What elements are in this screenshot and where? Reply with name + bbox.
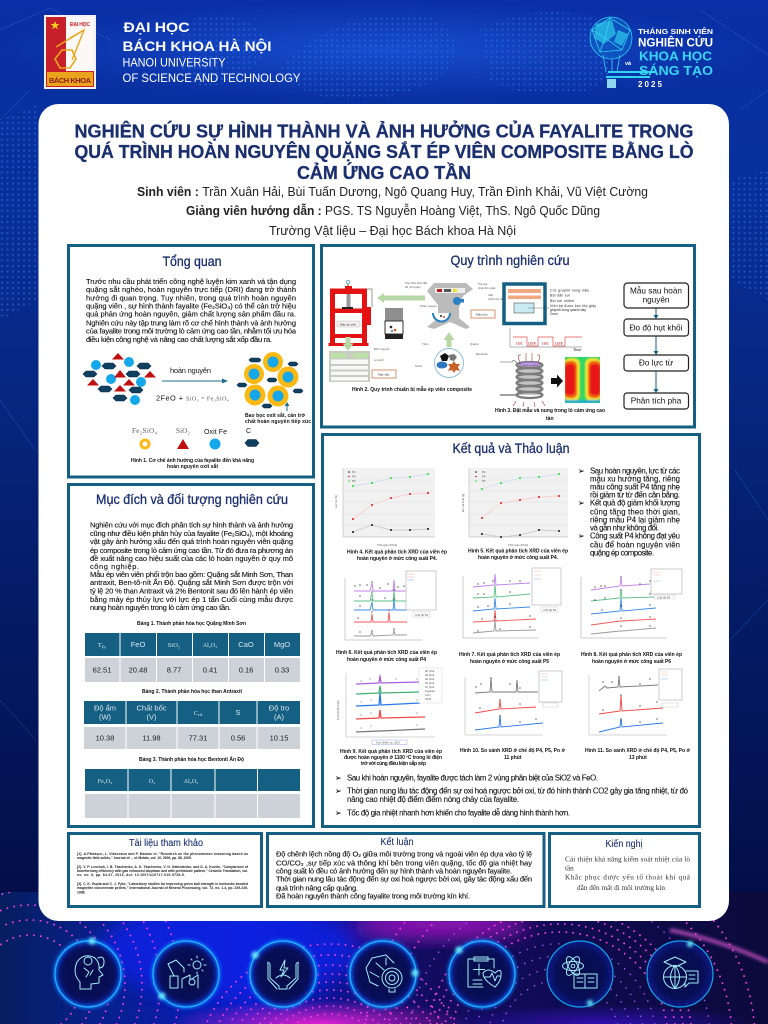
- chart: figure 10 XRD: [465, 671, 562, 735]
- furnace section: Bột dẫn sơi: [550, 292, 570, 298]
- chart: figure 9 XRD: 40 phút: [425, 677, 435, 681]
- hydraulic press: Máy ép viên: [340, 322, 357, 326]
- caption: figure 11: Hình 11. So sánh XRD ở chế độ P4, P5, Po ở: [585, 747, 690, 754]
- heating timing chart: OFF: [555, 341, 564, 346]
- objectives text: cũng như điều kiện phân hủy của fayalite (Fe₂SiO₄), một khoáng: [90, 529, 293, 538]
- chart: figure 5: Độ hụt khối (g): [461, 494, 465, 512]
- reference list: bioreforming efficiency with gas enhanced biophase and with prehistoric pattern," Ceramic Translation, vol.: [77, 869, 248, 873]
- table 2: Chất bốc: [136, 704, 167, 712]
- conclusion text: Thời gian nung lâu tác động đến sự oxi hoá ngược bởi oxi, gây tác động xấu đến: [276, 874, 532, 884]
- chart: figure 5: P4: [482, 470, 486, 474]
- caption: figure 5: hoàn nguyên ở mức công suất P4.: [478, 554, 559, 561]
- title: NGHIÊN CỨU SỰ HÌNH THÀNH VÀ ẢNH HƯỞNG CỦA FAYALITE TRONG: [74, 120, 694, 142]
- heating timing chart: ON: [542, 341, 549, 346]
- table 2: S: [235, 708, 241, 717]
- reference list: [1]. A.Pătrașcu, L. Vlăsceanu and P. Manoiu et. "Research on the phenomenon reasoning based on: [77, 852, 248, 856]
- temperature field: [564, 357, 601, 403]
- chart: figure 7 XRD: [463, 568, 561, 638]
- table 1: T: [98, 642, 102, 649]
- table 3: [85, 756, 300, 818]
- heading: objectives: Mục đích và đối tượng nghiên cứu: [96, 491, 288, 507]
- university name: OF SCIENCE AND TECHNOLOGY: [122, 73, 301, 85]
- heating timing chart: ON: [516, 341, 523, 346]
- conclusion text: quá trình nâng cấp quặng.: [276, 884, 358, 892]
- chart: figure 9 XRD: Fayalite: [425, 689, 435, 693]
- heading: process: Quy trình nghiên cứu: [450, 252, 570, 268]
- title: QUÁ TRÌNH HOÀN NGUYÊN QUẶNG SẮT ÉP VIÊN COMPOSITE BẰNG LÒ: [74, 141, 694, 162]
- panel: research process: [322, 246, 694, 427]
- heading: conclusion: Kết luận: [380, 836, 414, 848]
- conclusion text: công suất lò đều có ảnh hưởng đến sự hình thành và hoàn nguyên fayalite.: [276, 866, 512, 876]
- table 1: 20.48: [129, 666, 147, 674]
- objectives text: Mẫu ép viên viên phối trộn bao gồm: Quặng sắt Minh Sơn, Than: [90, 570, 293, 579]
- panel: objectives: [68, 484, 314, 826]
- heating timing chart: Time: [573, 347, 582, 352]
- table 1: FeO: [131, 640, 145, 649]
- results bullets: magnetic force: mẫu xu hướng tăng, riêng: [590, 474, 680, 484]
- reference list: magnetic field solids," Journal of ... of Metals, vol. 10, 2009, pp. 86, 2009.: [77, 856, 192, 860]
- heating timing chart: OFF: [528, 341, 537, 346]
- reactant cluster: [83, 353, 156, 405]
- mixer: Trả vào: [478, 282, 488, 286]
- caption: figure 10: Hình 10. So sánh XRD ở chế độ P4, P5, Po ở: [460, 747, 565, 754]
- mixer: [405, 281, 504, 329]
- results bullets: magnetic force: quặng ép composite.: [590, 548, 654, 558]
- chart: figure 9 XRD: 60 phút: [425, 673, 435, 677]
- recommendations text: Khắc phục được yếu tố thoát khí quá: [565, 874, 691, 882]
- conclusion text: CO/CO₂ ,sự tiếp xúc và thông khí bên trong viên quặng, tốc độ gia nhiệt hay: [276, 858, 532, 868]
- caption: figure 3: tần: [546, 416, 554, 422]
- chart: figure 4: P5: [352, 474, 356, 478]
- results bullets: fayalite: Thời gian nung lâu tác động đến sự oxi hoá ngược bởi oxi, từ đó hình thành CO2 gây gia tăng nhiệt, từ đó: [347, 786, 689, 796]
- recommendations text: dẫn đến mất đi môi trường kín: [577, 883, 665, 892]
- legend: Fe₂SiO₄: [132, 427, 158, 435]
- reaction arrow: hoàn nguyên: [170, 366, 211, 375]
- overview text: hướng đi quan trọng. Tuy nhiên, trong quá trình hoàn nguyên: [86, 293, 296, 302]
- objectives text: nung hoàn nguyên trong lò cảm ứng cao tần.: [90, 603, 231, 612]
- mould: [385, 308, 403, 339]
- table 3: Bảng 3. Thành phần hóa học Bentonit Ấn Độ: [139, 756, 244, 763]
- reaction equation: 2FeO + SiO₂ = Fe₂SiO₄: [156, 394, 229, 402]
- ingredient circle: Quặng: [470, 342, 479, 346]
- authors: [137, 185, 648, 238]
- table 1: Fe: [102, 644, 106, 650]
- overview text: của fayalite trong môi trường lò cảm ứng cao tần, nhằm tối ưu hóa: [86, 326, 297, 335]
- conclusion text: [276, 850, 532, 900]
- table 2: 10.38: [96, 734, 114, 742]
- table 1: CaO: [238, 640, 254, 649]
- chart: figure 4: P6: [352, 479, 356, 483]
- results bullets: magnetic force: Sau hoàn nguyên, lực từ các: [590, 466, 680, 476]
- overview text: quặng sắt nghèo, hoàn nguyên trực tiếp (DRI) đang trở thành: [86, 285, 296, 294]
- objectives text: bằng máy ép thủy lực với lực ép 1 tấn Cuối cùng mẫu được: [90, 595, 293, 604]
- drying cabinet: Bình nguyên: [374, 347, 390, 351]
- chart: figure 4: P4: [352, 470, 356, 474]
- caption: figure 3: [495, 407, 605, 422]
- caption: figure 10: [460, 747, 565, 761]
- step 2: Đo độ hụt khối: [630, 324, 683, 332]
- table 3: O₂: [149, 779, 155, 785]
- product cluster: chất hoàn nguyên tiếp xúc: [245, 418, 311, 425]
- results bullets: magnetic force: ➢: [578, 466, 585, 476]
- chart: figure 4: Thời gian (Phút): [377, 543, 397, 547]
- heading: references: Tài liệu tham khảo: [129, 837, 203, 849]
- caption: figure 2: Hình 2. Quy trình chuẩn bị mẫu ép viên composite: [352, 386, 472, 393]
- conclusion text: Độ chênh lệch nồng độ O₂ giữa môi trường trong và ngoài viên ép dựa vào tỷ lệ: [276, 850, 532, 858]
- caption: figure 3: Hình 3. Đặt mẫu và nung trong lò cảm ứng cao: [495, 407, 605, 414]
- results bullets: fayalite: Sau khi hoàn nguyên, fayalite được tách làm 2 vùng phân biệt của SiO2 và FeO.: [347, 774, 598, 782]
- furnace section: [504, 284, 596, 324]
- table 2: 0.56: [231, 734, 245, 742]
- step 1: [624, 283, 688, 308]
- process arrows: [342, 293, 454, 351]
- objectives text: vật gây ảnh hưởng xấu đến quá trình hoàn nguyên viên quặng: [90, 537, 293, 546]
- table 1: [85, 621, 300, 682]
- results bullets: fayalite: nâng cao nhiệt độ điểm điểm nóng chảy của fayalite.: [347, 795, 519, 804]
- caption: figure 9: được hoàn nguyên ở 1100 ºC trong lò điện: [344, 755, 442, 761]
- table 2: 77.31: [189, 734, 207, 742]
- captions: figures 6 to 8: Hình 8. Kết quả phân tích XRD của viên ép: [581, 651, 682, 658]
- furnace section: Cốc graphit nung mẫu: [550, 288, 589, 292]
- table 1: 0.16: [239, 666, 253, 674]
- chart: figure 9 XRD: [336, 668, 442, 745]
- chart: figure 8 XRD: Chế độ P6: [657, 596, 671, 600]
- caption: figure 4: Hình 4. Kết quả phân tích XRD của viên ép: [347, 548, 447, 556]
- panel: recommendations: [550, 834, 700, 906]
- table 2: C: [194, 711, 198, 717]
- icon: hands and lightning: [250, 941, 316, 1007]
- table 1: Bảng 1. Thành phần hóa học Quặng Minh Sơn: [137, 621, 246, 627]
- caption: figure 5: [468, 548, 568, 561]
- mixer: Máy trộn: [476, 312, 488, 316]
- table 1: 62.51: [93, 666, 111, 674]
- table 2: (A): [274, 712, 284, 722]
- caption: figure 11: [585, 747, 690, 761]
- heading: results: Kết quả và Thảo luận: [452, 440, 570, 456]
- logo: Bách Khoa shield: ĐẠI HỌC: [70, 22, 90, 28]
- ingredient circle: [415, 342, 488, 378]
- heating timing chart: [510, 328, 582, 352]
- main white card: [38, 104, 729, 921]
- table 1: 0.41: [203, 666, 217, 674]
- chart: figure 9 XRD: FeO: [425, 693, 431, 697]
- step 3: Đo lực từ: [639, 358, 674, 368]
- hydraulic press: [328, 280, 372, 346]
- legend: SiO₂: [176, 427, 191, 435]
- results bullets: magnetic force: Kết quả độ giảm khối lượng: [590, 498, 680, 508]
- objectives text: tỷ lệ 20 % than Antraxit và 2% Bentonit sau đó lên hành ép viên: [90, 586, 293, 596]
- captions: figures 6 to 8: Hình 7. Kết quả phân tích XRD của viên ép: [459, 651, 560, 658]
- caption: figure 1: Hình 1. Cơ chế ảnh hưởng của fayalite đến khả năng: [131, 457, 254, 464]
- objectives text: công nghiệp.: [90, 562, 139, 571]
- table 2: cd: [198, 712, 203, 717]
- step 1: nguyên: [643, 296, 670, 304]
- furnace section: Viên ép được bọc lớp giấy: [550, 304, 596, 308]
- captions: figures 6 to 8: hoàn nguyên ở mức công suất P4: [347, 656, 426, 663]
- table 2: Bảng 2. Thành phần hóa học than Antraxit: [142, 689, 242, 695]
- event logo: student research month 2025: KHOA HỌC: [639, 48, 713, 64]
- table 3: Fe₂O₃: [98, 779, 112, 785]
- university name: [122, 20, 301, 85]
- caption: figure 4: [347, 548, 447, 562]
- table 2: Độ ẩm: [94, 704, 116, 712]
- icon: AI head: [55, 938, 121, 1007]
- title: CẢM ỨNG CAO TẦN: [297, 162, 471, 183]
- figure 3: induction furnace: [495, 284, 605, 422]
- captions: figures 6 to 8: [336, 649, 682, 665]
- objectives text: đề xuất nâng cao hiệu suất của các lò hoàn nguyên ở quy mô: [90, 554, 293, 563]
- mixer: Cần: [488, 293, 494, 297]
- chart: figure 5: P5: [482, 474, 486, 478]
- event logo: student research month 2025: THÁNG SINH VIÊN: [638, 27, 713, 36]
- results bullets: fayalite: [335, 774, 689, 818]
- furnace section: graphit xung quanh dày: [550, 308, 586, 312]
- authors: Sinh viên : Trần Xuân Hải, Bùi Tuấn Dương, Ngô Quang Huy, Trần Đình Khải, Vũ Việt Cường: [137, 185, 648, 199]
- mixer: chỉnh tốc độ: [488, 297, 504, 301]
- reference list: magnetite concentrate pellets," International Journal of Mineral Processing, vol. 72, no. 1-4, pp. 239-249,: [77, 886, 248, 890]
- overview text: quặng viên , sự hình thành fayalite (Fe₂SiO₄) có thể cản trở hiệu: [86, 302, 296, 310]
- title: [74, 120, 694, 183]
- panel: references: [68, 834, 262, 906]
- results bullets: magnetic force: cầu để hoàn nguyên viên: [590, 540, 680, 550]
- captions: figures 6 to 8: hoàn nguyên ở mức công suất P6: [592, 658, 671, 665]
- product cluster: Bao bọc oxit sắt, cản trở: [245, 412, 305, 419]
- conclusion text: Đã hoàn nguyên thành công fayalite trong môi trường kín khí.: [276, 892, 470, 900]
- chart: figure 9 XRD: 90 phút: [425, 669, 435, 673]
- table 1: MgO: [274, 640, 290, 649]
- results bullets: magnetic force: cũng tăng theo thời gian,: [590, 508, 680, 516]
- table 2: 10.15: [270, 734, 288, 742]
- captions: figures 6 to 8: Hình 6. Kết quả phân tích XRD của viên ép: [336, 649, 437, 656]
- step 4: Phân tích pha: [631, 396, 682, 406]
- authors: Trường Vật liệu – Đại học Bách khoa Hà Nội: [269, 224, 516, 238]
- chart: figure 9 XRD: 10 phút: [425, 685, 435, 689]
- results bullets: magnetic force: rồi giảm từ từ đến cân bằng.: [590, 490, 680, 500]
- authors: Giảng viên hướng dẫn : PGS. TS Nguyễn Hoàng Việt, ThS. Ngô Quốc Dũng: [186, 203, 600, 218]
- panel: conclusion: [268, 834, 544, 906]
- results bullets: magnetic force: [578, 466, 680, 558]
- caption: figure 1: [131, 457, 254, 470]
- drying cabinet: Máy sấy: [378, 372, 390, 376]
- table 1: SiO₂: [168, 642, 180, 649]
- overview text: Trước nhu cầu phát triển công nghệ luyện kim xanh và tận dụng: [86, 277, 296, 286]
- bottom band: [0, 892, 768, 1024]
- furnace section: Bột sơi nhiệm: [550, 299, 574, 303]
- icon: medical clipboard and heart: [449, 941, 515, 1007]
- results bullets: magnetic force: mẫu công suất P4 tăng nhẹ: [590, 482, 680, 492]
- university name: HANOI UNIVERSITY: [122, 58, 226, 70]
- figure 2: sample preparation: [328, 280, 504, 393]
- process flowchart: [624, 283, 688, 409]
- reference list: [77, 852, 249, 894]
- overview text: [86, 277, 297, 344]
- recommendations text: [565, 854, 691, 892]
- table 2: (W): [99, 712, 112, 722]
- drying cabinet: [329, 347, 396, 382]
- mixer: chạy đơn giản: [478, 286, 496, 290]
- figure 1: fayalite mechanism: [83, 352, 311, 470]
- results bullets: magnetic force: ➢: [578, 498, 585, 508]
- university name: ĐẠI HỌC: [124, 20, 190, 35]
- event logo: student research month 2025: SÁNG TẠO: [639, 63, 713, 78]
- caption: figure 4: hoàn nguyên ở mức công suất P4.: [357, 555, 438, 562]
- caption: figure 1: hoàn nguyên oxit sắt: [167, 463, 218, 470]
- caption: figure 9: Hình 9. Kết quả phân tích XRD của viên ép: [340, 748, 442, 755]
- event logo: student research month 2025: 2025: [638, 80, 663, 89]
- results bullets: magnetic force: Công suất P4 không đạt yêu: [590, 532, 680, 540]
- legend: [132, 427, 259, 450]
- mixer: độ, thời gian: [405, 285, 421, 289]
- reference list: [2]. V. P. Levchuk, I. B. Tkachenko, A. K. Tkachenko, V. N. Gakhokidze, and D. A. Kovtin, "Comparison of: [77, 865, 249, 869]
- chart: figure 4: Lực từ (N): [334, 495, 338, 508]
- results bullets: fayalite: ➢: [335, 786, 342, 796]
- chart: figure 5: Thời gian (Phút): [508, 543, 528, 547]
- table 1: 0.33: [275, 666, 289, 674]
- overview text: Nghiên cứu này tập trung làm rõ cơ chế hình thành và ảnh hưởng: [86, 318, 296, 327]
- panel: results: [322, 434, 700, 826]
- caption: figure 10: 11 phút: [504, 755, 522, 761]
- objectives text: antraxit, Ben-tô-nít Ấn Độ. Quặng sắt Minh Sơn được trộn với: [90, 577, 293, 587]
- table 2: Độ tro: [269, 704, 289, 712]
- product cluster: [237, 352, 311, 425]
- objectives text: [90, 520, 293, 612]
- mixer: Nhào nguyên: [420, 304, 437, 308]
- results bullets: magnetic force: và gần như không đổi.: [590, 524, 659, 532]
- chart: figure 11 XRD: [589, 669, 682, 735]
- furnace section: 2mm: [550, 312, 558, 316]
- reference list: [3]. C. K. Gupta and C. J. Pyke, "Laboratory studies for improving green ball strength in bentonite-bonded: [77, 882, 248, 886]
- objectives text: ép composite trong lò cảm ứng cao tần. Từ đó đưa ra phương án: [90, 546, 293, 555]
- icon: robot arm and factory: [153, 941, 219, 1007]
- table 2: (V): [146, 712, 157, 722]
- chart: figure 8 XRD: [581, 569, 682, 638]
- university name: BÁCH KHOA HÀ NỘI: [122, 39, 272, 54]
- table 3: Al₂O₃: [184, 779, 198, 785]
- drying cabinet: Lò sưởi: [374, 358, 384, 362]
- results bullets: fayalite: Tốc độ gia nhiệt nhanh hơn khiến cho fayalite dễ dàng hình thành hơn.: [347, 808, 570, 818]
- table 1: 8.77: [167, 666, 181, 674]
- caption: figure 5: Hình 5. Kết quả phân tích XRD của viên ép: [468, 548, 568, 554]
- table 2: 11.98: [142, 734, 161, 742]
- chart: figure 6 XRD: Chế độ P4: [415, 613, 429, 617]
- recommendations text: tần: [565, 864, 574, 872]
- chart: figure 9 XRD: Cường độ (cps): [336, 700, 340, 720]
- chart: figure 5: [461, 468, 568, 547]
- icon: graduation globe and chat: [647, 941, 713, 1007]
- caption: figure 9: [340, 748, 442, 767]
- chart: figure 5: P6: [482, 479, 486, 483]
- table 1: Al₂O₃: [203, 643, 217, 649]
- chart: figure 6 XRD: [345, 571, 436, 640]
- reference list: 1988.: [77, 890, 86, 894]
- results bullets: fayalite: ➢: [335, 808, 342, 818]
- objectives text: Nghiên cứu với mục đích phân tích sự hình thành và ảnh hưởng: [90, 520, 293, 530]
- heading: recommendations: Kiến nghị: [606, 838, 642, 850]
- results bullets: fayalite: ➢: [335, 774, 342, 782]
- chart: figure 4: [334, 468, 435, 547]
- icon: circuit brain with fingerprint: [350, 941, 418, 1007]
- ingredient circle: Than: [422, 342, 429, 346]
- caption: figure 9: trở với cùng điều kiện sắp xếp: [361, 760, 426, 767]
- chart: figure 9 XRD: 20 phút: [425, 681, 435, 685]
- chart: figure 7 XRD: Chế độ P5: [543, 608, 557, 612]
- overview text: điều kiện công nghệ và nâng cao chất lượng sắt xốp đầu ra.: [86, 335, 272, 344]
- captions: figures 6 to 8: hoàn nguyên ở mức công suất P5: [470, 658, 549, 665]
- ingredient circle: Nước: [415, 364, 423, 368]
- logo: Bách Khoa shield: BÁCH KHOA: [49, 76, 92, 85]
- caption: figure 11: 13 phút: [629, 755, 647, 761]
- ingredient circle: Bentonite: [476, 352, 488, 356]
- heading: overview: Tổng quan: [162, 253, 222, 269]
- results bullets: magnetic force: ➢: [578, 532, 585, 540]
- step 1: Mẫu sau hoàn: [630, 286, 682, 296]
- legend: C: [246, 428, 251, 435]
- mixer: Khu định hình đặt: [405, 281, 427, 285]
- reference list: no. no. 6, pp. 64-67, 2015, doi: 10.1007/s10717-015-9728-5.: [77, 873, 185, 877]
- results bullets: magnetic force: riêng mẫu P4 lại giảm nhẹ: [590, 516, 680, 524]
- table 2: [84, 689, 300, 749]
- recommendations text: Cải thiện khả năng kiểm soát nhiệt của lò: [565, 854, 690, 864]
- icon: atom and open book: [547, 941, 613, 1007]
- event logo: student research month 2025: NGHIÊN CỨU: [638, 36, 713, 50]
- event logo: student research month 2025: [590, 17, 713, 89]
- chart: figure 9 XRD: Góc nhiễu xạ, 2θ(°): [376, 740, 400, 745]
- chart: figure 9 XRD: SiO2: [425, 697, 432, 701]
- induction coil: [500, 353, 563, 407]
- legend: Oxit Fe: [204, 429, 227, 436]
- reaction arrow: [162, 366, 228, 384]
- event logo: student research month 2025: và: [625, 61, 632, 67]
- overview text: quả phản ứng hoàn nguyên, giảm chất lượng sản phẩm đầu ra.: [86, 310, 296, 318]
- panel: overview: [68, 246, 314, 477]
- logo: Bách Khoa shield: [44, 15, 96, 89]
